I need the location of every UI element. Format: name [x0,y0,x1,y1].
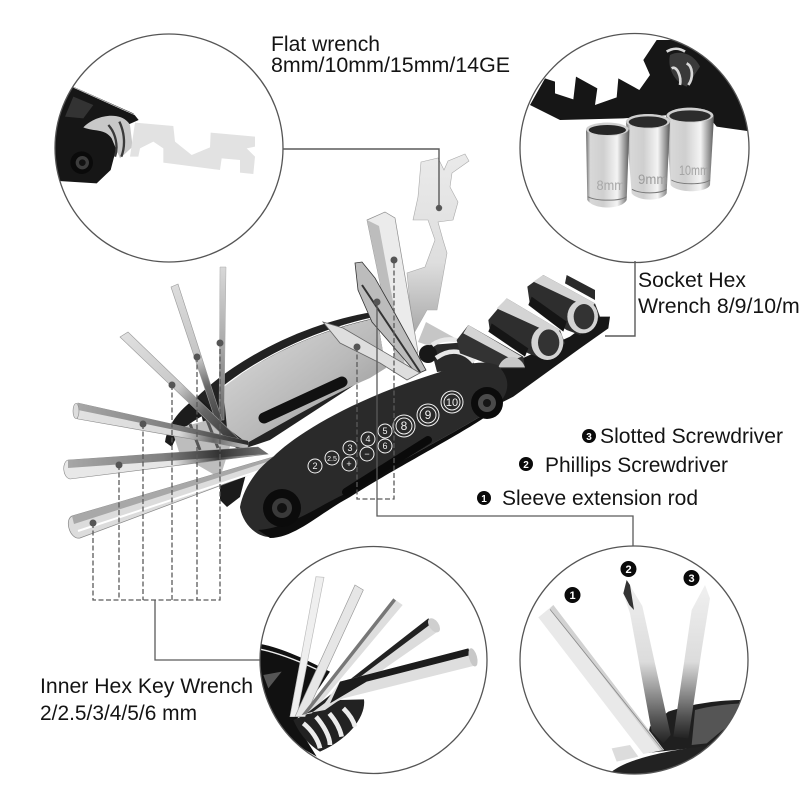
screwdriver number badge 1 [564,587,580,603]
screwdriver number badge 2: 2 [625,564,632,576]
label: socket hex wrench [638,268,800,318]
front handle [240,363,507,538]
flat wrench blade [407,154,469,335]
hex key 5 mm [64,447,268,479]
slotted bit [673,585,710,738]
handle slot [346,440,428,492]
circle: flat wrench detail [53,34,283,262]
size numbers: 9 [425,408,432,422]
label: inner hex key wrench: 2/2.5/3/4/5/6 mm [40,701,197,725]
hex key 4 mm [73,403,248,449]
label: slotted screwdriver: 3 [586,432,592,443]
hex key 2.5 mm [171,284,222,422]
label: sleeve extension rod: 1 [481,494,487,505]
size numbers: 3 [347,443,353,453]
socket 10 mm: 10mm [679,162,709,178]
socket 10 mm [666,108,714,191]
phillips bit [623,580,671,743]
circle: screwdriver detail [520,546,748,777]
slotted screwdriver [323,322,420,380]
circle: socket hex detail [520,34,753,262]
middle coil [418,322,475,372]
label: flat wrench: 8mm/10mm/15mm/14GE [271,53,510,77]
label: phillips screwdriver: 2 [523,460,529,471]
socket 8 mm [457,325,525,368]
size numbers [312,397,458,471]
label: socket hex wrench: Socket Hex [638,268,746,292]
connector: screwdrivers [354,256,633,546]
label: phillips screwdriver: Phillips Screwdriver [545,454,728,477]
size numbers: 2 [312,461,318,471]
socket 10 mm [527,275,600,335]
right bolt [471,387,503,419]
label: slotted screwdriver: Slotted Screwdriver [600,425,783,448]
size markings [308,391,463,473]
socket tray [493,275,610,407]
label: inner hex key wrench [40,674,253,725]
socket 8 mm [586,122,629,207]
label: sleeve extension rod: Sleeve extension rod [502,487,698,510]
phillips screwdriver [355,262,426,374]
size numbers: 2.5 [327,456,337,463]
size numbers: 10 [446,397,458,409]
socket 9 mm [488,298,565,360]
size numbers: + [346,459,352,469]
connector: hex keys [90,340,260,660]
size numbers: 5 [382,426,388,436]
left bolt [263,489,301,527]
hex key 3 mm [120,332,240,444]
size numbers: − [364,449,370,459]
circle: inner hex key detail [257,546,487,774]
size numbers: 4 [365,434,371,444]
sleeve extension rod [538,605,664,754]
connector: socket hex wrench [605,261,635,336]
label: flat wrench [271,32,510,77]
size numbers: 8 [401,419,408,433]
socket hex rod [367,212,418,368]
label: inner hex key wrench: Inner Hex Key Wrench [40,674,253,698]
screwdriver number badge 3: 3 [688,573,695,585]
screwdriver number badge 3 [684,570,700,586]
hex key 6 mm [68,457,273,538]
socket 9 mm [626,114,670,200]
screwdriver number badge 1: 1 [569,590,576,602]
socket 9 mm: 9mm [638,171,667,187]
back plate [165,312,386,450]
screwdriver number badge 2 [620,561,636,577]
socket 8 mm: 8mm [596,177,625,193]
label: flat wrench: Flat wrench [271,32,380,56]
rear coil at hex key pivot [172,418,247,507]
size numbers: 6 [382,441,388,451]
connector: flat wrench [283,149,442,210]
hex key 2 mm [219,267,226,420]
main tool [64,154,610,538]
